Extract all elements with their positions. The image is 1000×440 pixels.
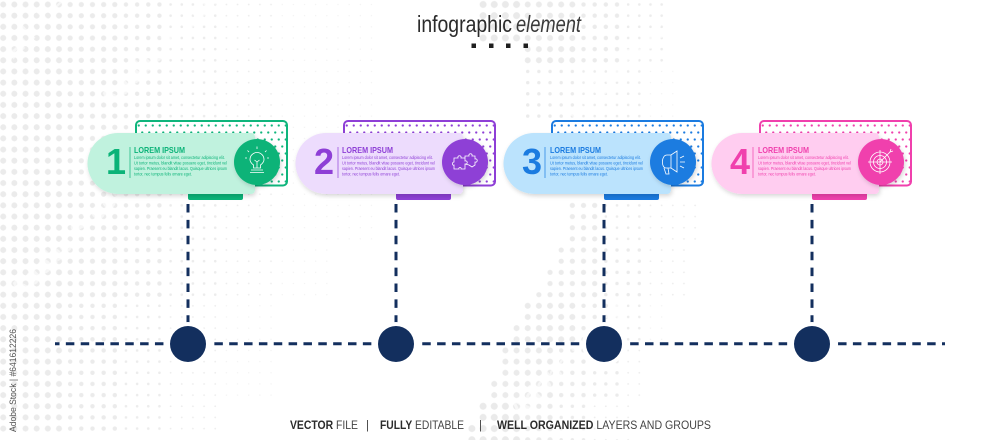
card 3	[503, 121, 703, 200]
footer tagline: FULLY EDITABLE	[380, 420, 464, 432]
card 2: 2	[314, 141, 334, 182]
title: infographic	[417, 11, 512, 37]
stock watermarks: Adobe Stock	[504, 296, 632, 424]
card 2: Ut tortor metus, blandit vitae posuere eget, tincidunt vel	[342, 160, 435, 166]
stock watermarks: Adobe Stock	[494, 136, 622, 264]
card 1: sapien. Praesent eu blandit lacus. Quisque ultrices ipsum	[134, 166, 227, 171]
card 2: LOREM IPSUM	[342, 145, 393, 155]
stock id vertical text: Adobe Stock | #641612226	[8, 329, 19, 432]
card 3: Lorem ipsum dolor sit amet, consectetur adipiscing elit.	[550, 155, 641, 160]
halftone dot background	[0, 0, 701, 440]
icon: megaphone	[662, 151, 685, 174]
card 3: tortor, nec tempus felis ornare eget.	[550, 172, 608, 176]
card 4: Ut tortor metus, blandit vitae posuere eget, tincidunt vel	[758, 160, 851, 166]
footer tagline: VECTOR FILE	[290, 420, 358, 432]
card 4: sapien. Praesent eu blandit lacus. Quisque ultrices ipsum	[758, 166, 851, 171]
card 3: Ut tortor metus, blandit vitae posuere eget, tincidunt vel	[550, 160, 643, 166]
stock watermarks: Adobe Stock	[554, 6, 682, 134]
card 2: sapien. Praesent eu blandit lacus. Quisque ultrices ipsum	[342, 166, 435, 171]
card 3: 3	[522, 141, 542, 182]
icon: puzzle pieces	[452, 154, 477, 169]
card 2	[296, 121, 495, 200]
card 2: tortor, nec tempus felis ornare eget.	[342, 172, 400, 176]
title: element	[516, 11, 582, 37]
footer tagline: |	[366, 420, 369, 432]
card 1	[87, 121, 287, 200]
footer tagline: |	[479, 420, 482, 432]
footer tagline: WELL ORGANIZED LAYERS AND GROUPS	[497, 420, 711, 432]
card 4: tortor, nec tempus felis ornare eget.	[758, 172, 816, 176]
stock watermarks: Adobe Stock	[217, 204, 345, 332]
card 2: Lorem ipsum dolor sit amet, consectetur adipiscing elit.	[342, 155, 433, 160]
title	[417, 11, 582, 37]
card 1: LOREM IPSUM	[134, 145, 185, 155]
card 4	[711, 121, 911, 200]
icon: light bulb	[245, 146, 269, 172]
card 1: 1	[106, 141, 126, 182]
card 3: LOREM IPSUM	[550, 145, 601, 155]
card 4: 4	[730, 141, 750, 182]
card 1: Lorem ipsum dolor sit amet, consectetur adipiscing elit.	[134, 155, 225, 160]
icon: target	[868, 149, 893, 174]
stock watermarks: Adobe Stock	[4, 176, 132, 304]
footer tagline	[290, 420, 711, 432]
title dots	[472, 44, 528, 48]
card 4: LOREM IPSUM	[758, 145, 809, 155]
card 1: tortor, nec tempus felis ornare eget.	[134, 172, 192, 176]
card 4: Lorem ipsum dolor sit amet, consectetur adipiscing elit.	[758, 155, 849, 160]
stock watermarks	[0, 0, 682, 424]
timeline	[55, 204, 945, 362]
card 1: Ut tortor metus, blandit vitae posuere eget, tincidunt vel	[134, 160, 227, 166]
card 3: sapien. Praesent eu blandit lacus. Quisque ultrices ipsum	[550, 166, 643, 171]
